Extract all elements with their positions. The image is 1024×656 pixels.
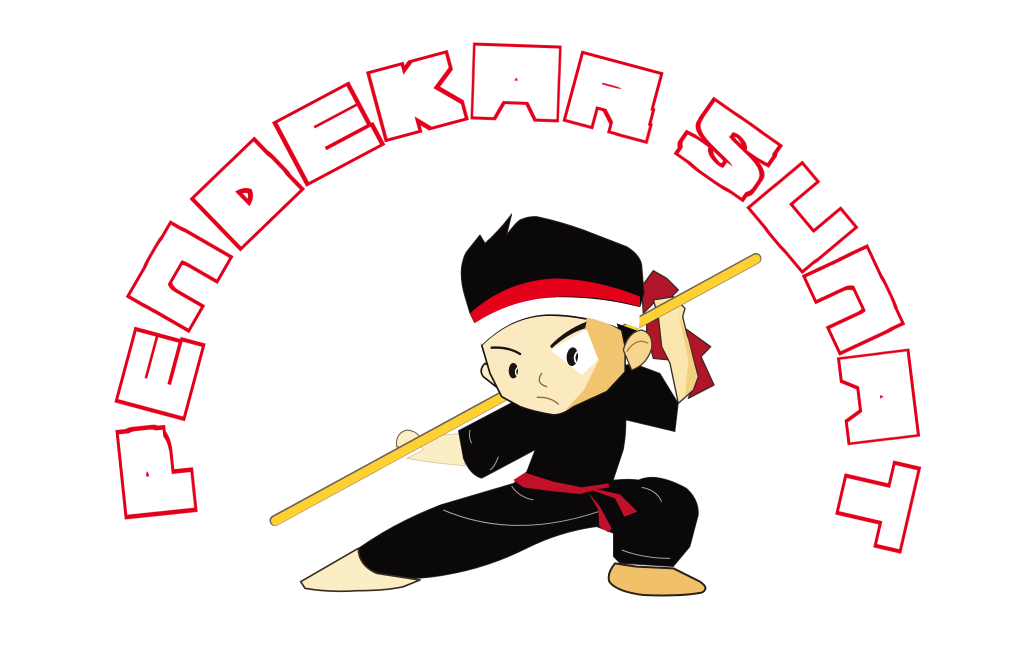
back foot — [609, 563, 705, 595]
left ear — [481, 363, 498, 387]
hair — [461, 214, 644, 323]
character: pendekar boy — [275, 214, 756, 595]
arched title: n — [101, 204, 245, 342]
arched title: E — [109, 331, 210, 418]
head — [461, 214, 652, 415]
arched title: n — [790, 230, 931, 363]
headband red stripe — [470, 278, 640, 323]
back arm and headband tails — [642, 271, 714, 403]
arched title: D — [190, 138, 304, 252]
arched title: T — [826, 461, 925, 543]
left hand — [396, 430, 465, 466]
right eye — [550, 322, 598, 375]
staff — [275, 258, 756, 521]
right ear — [623, 330, 652, 370]
face shadow — [565, 317, 624, 411]
arched title: R — [561, 44, 664, 149]
arched title: K — [370, 47, 460, 147]
face — [482, 315, 625, 415]
left eye — [492, 348, 520, 378]
arched title: A — [478, 37, 555, 129]
side hair — [617, 323, 640, 352]
arched title: U — [740, 156, 864, 280]
arched title: S — [668, 90, 787, 211]
headband white stripe — [474, 297, 640, 345]
black uniform — [358, 363, 698, 578]
nose and mouth — [537, 373, 558, 404]
belt — [513, 473, 637, 532]
arched title: P — [111, 431, 204, 513]
arched title: A — [831, 355, 925, 439]
arched title — [101, 37, 931, 543]
front foot — [301, 548, 420, 591]
arched title: E — [274, 80, 380, 190]
